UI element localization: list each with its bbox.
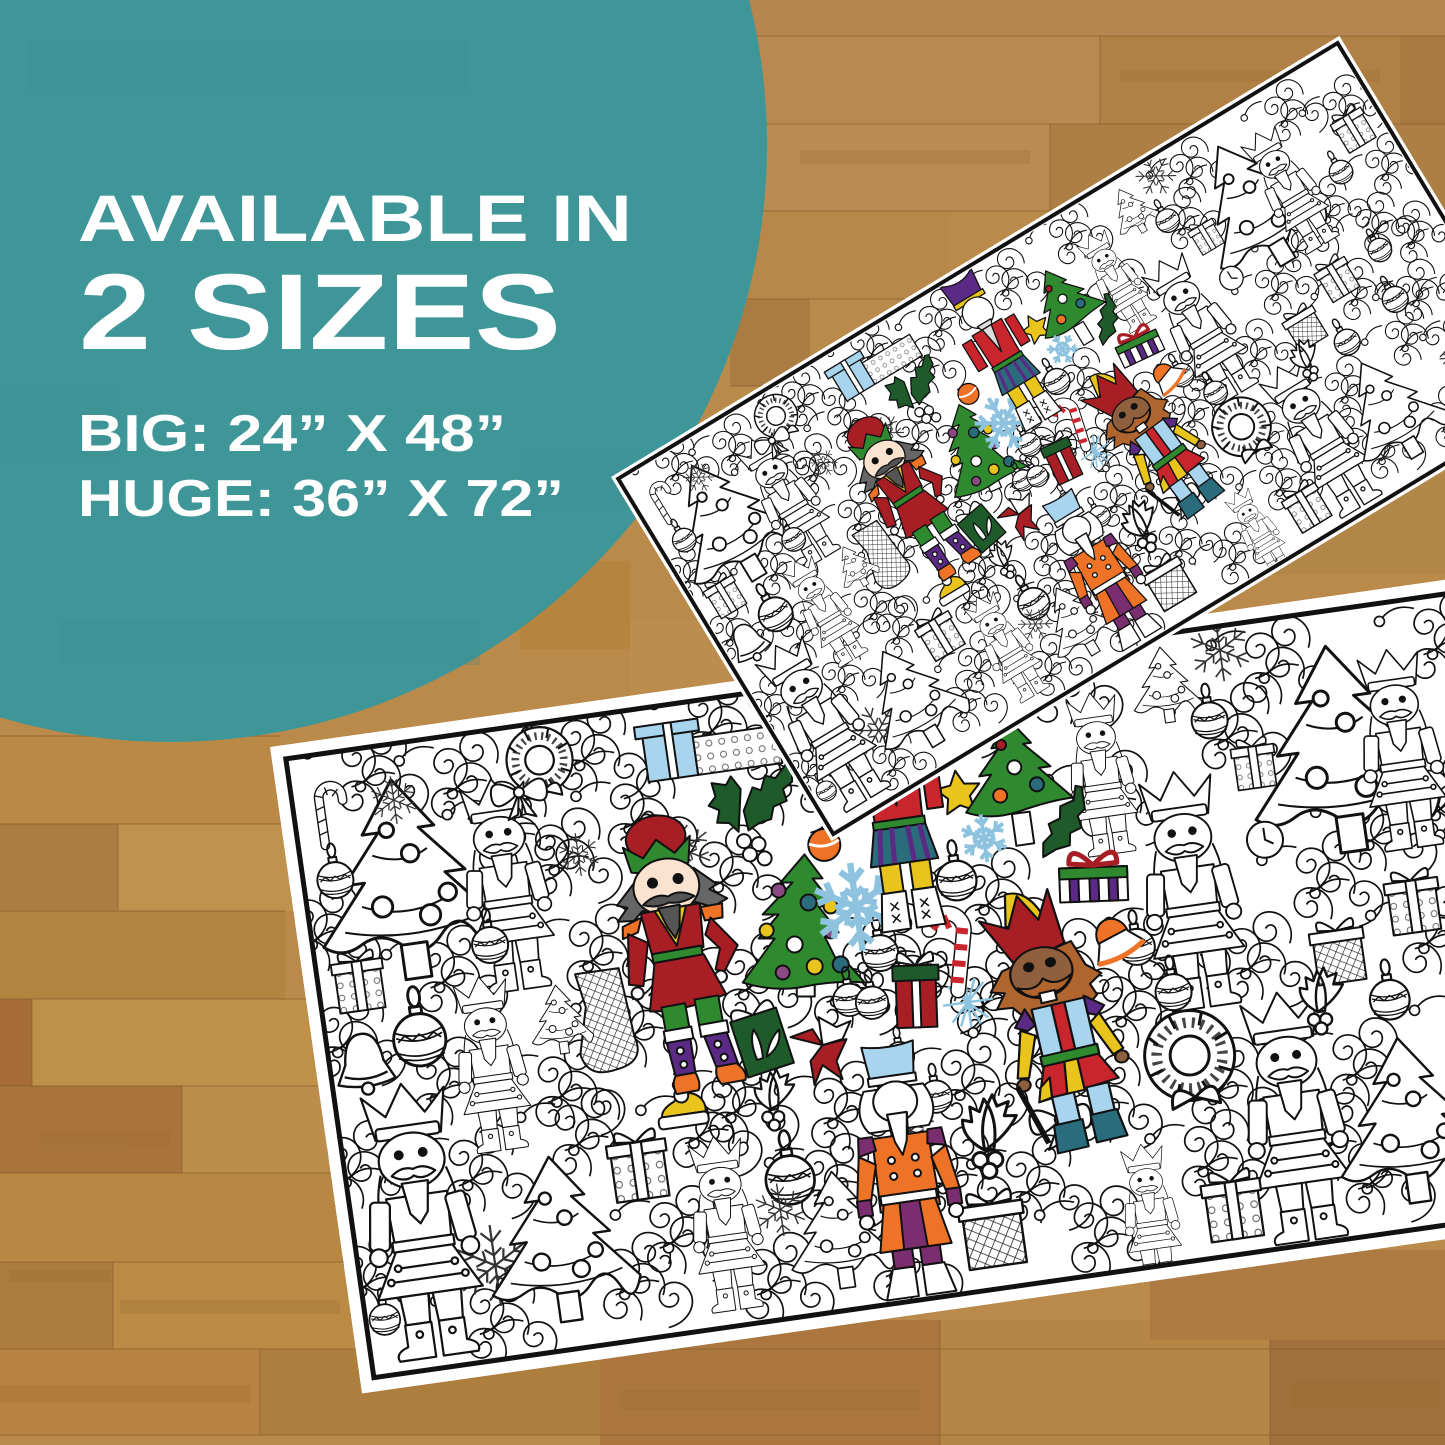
heading: available in: AVAILABLE IN <box>78 181 632 255</box>
small poster <box>587 28 1445 855</box>
heading: 2 sizes: 2 SIZES <box>79 251 561 372</box>
teal circle <box>0 0 767 742</box>
size: big: BIG: 24” X 48” <box>78 405 506 463</box>
big poster <box>231 555 1445 1399</box>
size: huge: HUGE: 36” X 72” <box>78 470 564 528</box>
